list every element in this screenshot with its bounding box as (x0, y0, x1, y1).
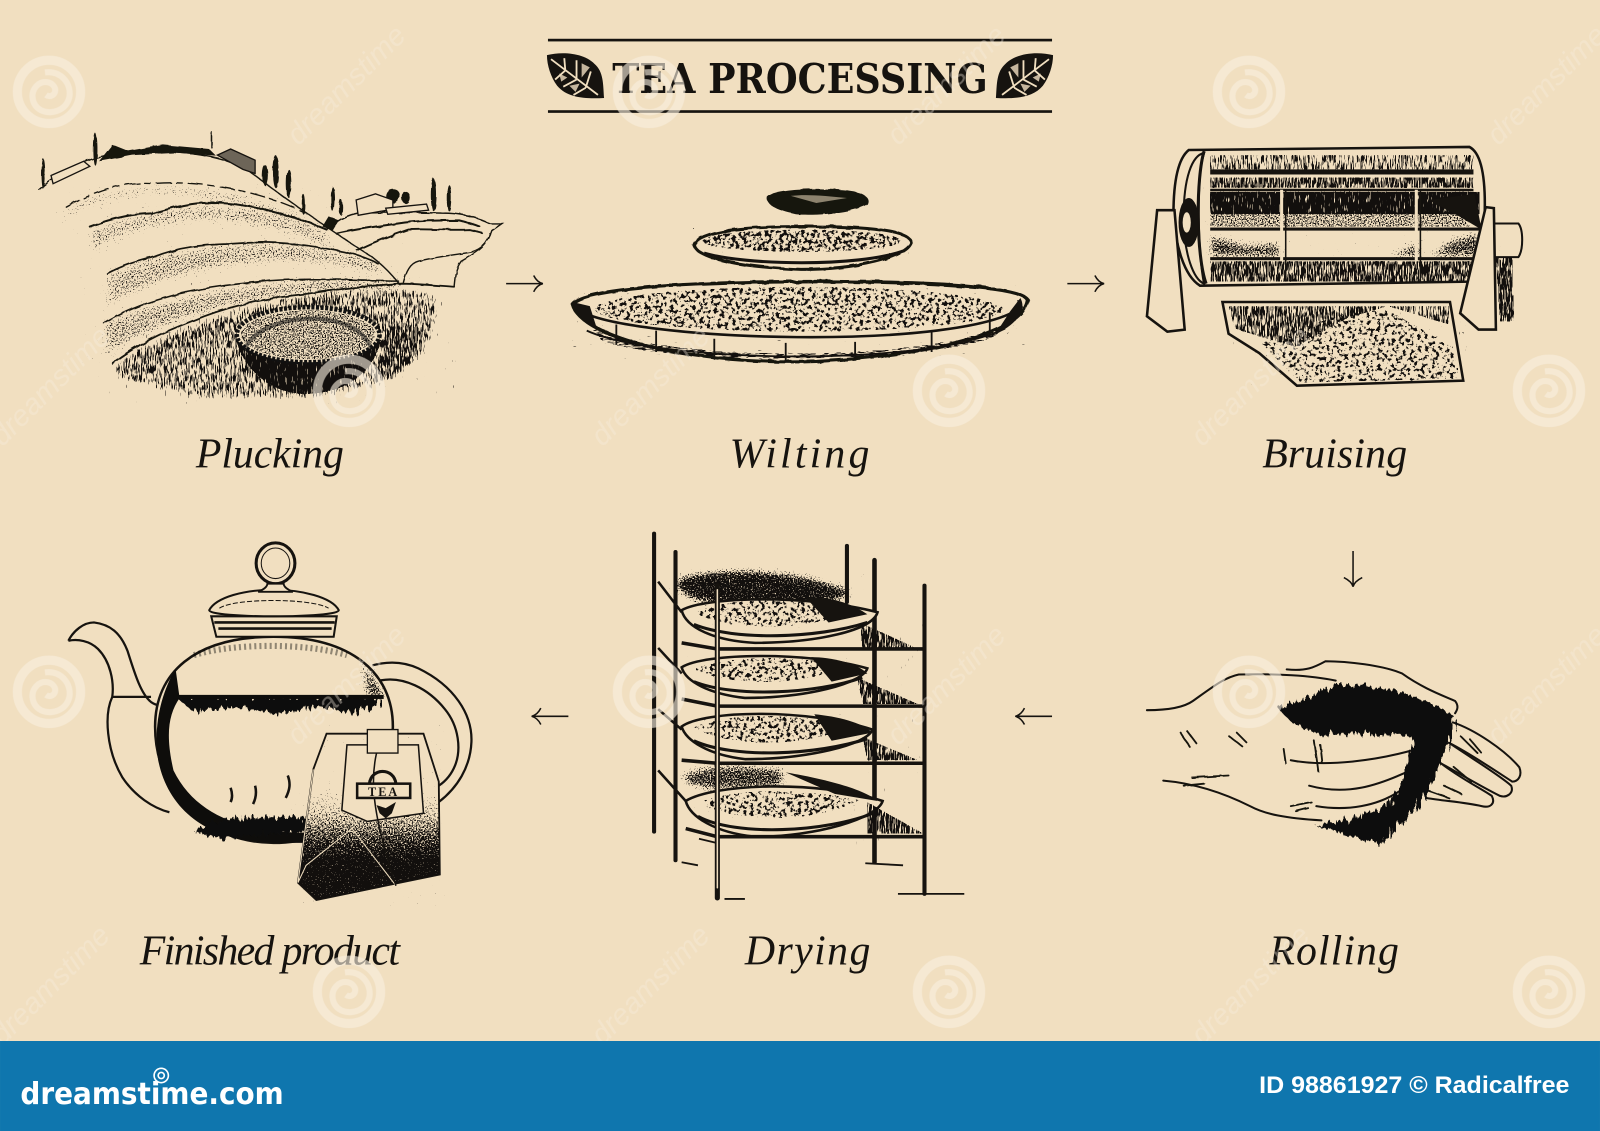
third trays (682, 714, 872, 759)
label: Finished product: Finished product (139, 928, 401, 974)
drum end disc (1179, 151, 1206, 284)
icon: right leaf (996, 53, 1053, 98)
left stand (1147, 210, 1185, 332)
rear stand and axle (1494, 223, 1522, 321)
hill stipple rows (67, 187, 400, 357)
tea bag tag: TEA (368, 785, 399, 799)
large bottom tray (572, 282, 1028, 362)
illustration: wilting trays (572, 189, 1028, 362)
illustration: drying rack (654, 534, 964, 899)
title block (547, 39, 1053, 113)
hand shading (1181, 731, 1482, 811)
teapot spout (68, 622, 169, 812)
teapot body (155, 637, 393, 843)
arrow: bruising to rolling (1344, 551, 1362, 587)
watermark wordmarks: dreamstime (1184, 919, 1317, 1051)
hill ridge lines (39, 152, 502, 363)
illustration: teapot with tea bag (68, 543, 471, 900)
label: Drying: Drying (744, 928, 870, 974)
arrow: wilting to bruising (1067, 276, 1104, 292)
middle tray (694, 227, 911, 269)
small top tray (767, 189, 868, 215)
basket (237, 307, 381, 394)
collecting tray (1222, 302, 1463, 386)
teapot lid (209, 543, 339, 637)
trees and houses (41, 132, 451, 231)
arrow: rolling to drying (1015, 708, 1052, 724)
watermark wordmarks: dreamstime (880, 19, 1013, 151)
farm buildings (51, 149, 429, 215)
illustration: bruising machine (1147, 147, 1522, 386)
arrow: plucking to wilting (506, 276, 543, 292)
back poles (654, 534, 874, 862)
footer bar (0, 1041, 1600, 1131)
bottom trays (682, 766, 883, 837)
front poles (717, 586, 924, 898)
top trays (676, 571, 878, 643)
arrow: drying to finished product (532, 708, 568, 724)
icon: left leaf (547, 53, 604, 98)
title rule bottom (548, 110, 1052, 113)
rolled tea leaves (1280, 685, 1455, 844)
grass field (114, 289, 441, 398)
title text: TEA PROCESSING (612, 55, 988, 103)
watermark wordmarks: dreamstime (1184, 320, 1317, 452)
label: Bruising: Bruising (1262, 431, 1407, 477)
watermark wordmarks: dreamstime (280, 19, 413, 151)
watermark wordmarks: dreamstime (584, 919, 717, 1051)
hand outline (1147, 661, 1520, 820)
tea bag tag (342, 730, 423, 886)
teapot handle (372, 663, 471, 802)
second trays (682, 656, 867, 698)
footer logo text: dreamstime.com (20, 1077, 284, 1112)
label: Rolling: Rolling (1268, 928, 1399, 974)
floor shadow (682, 839, 964, 899)
footer logo spiral (154, 1068, 168, 1083)
shelves with slats (658, 582, 923, 837)
label: Plucking: Plucking (195, 431, 344, 477)
illustration: plucking, hills and basket (39, 132, 502, 398)
watermark wordmarks: dreamstime (880, 619, 1013, 751)
label: Wilting: Wilting (730, 431, 869, 477)
illustration: rolling, hand with leaves (1147, 661, 1520, 844)
watermark wordmarks: dreamstime (584, 320, 717, 452)
footer credit: ID 98861927 © Radicalfree (1259, 1072, 1569, 1099)
title rule top (548, 39, 1052, 41)
right stand (1460, 207, 1496, 330)
watermark wordmarks: dreamstime (280, 619, 413, 751)
tea bag (298, 730, 440, 900)
drum body (1173, 147, 1485, 286)
